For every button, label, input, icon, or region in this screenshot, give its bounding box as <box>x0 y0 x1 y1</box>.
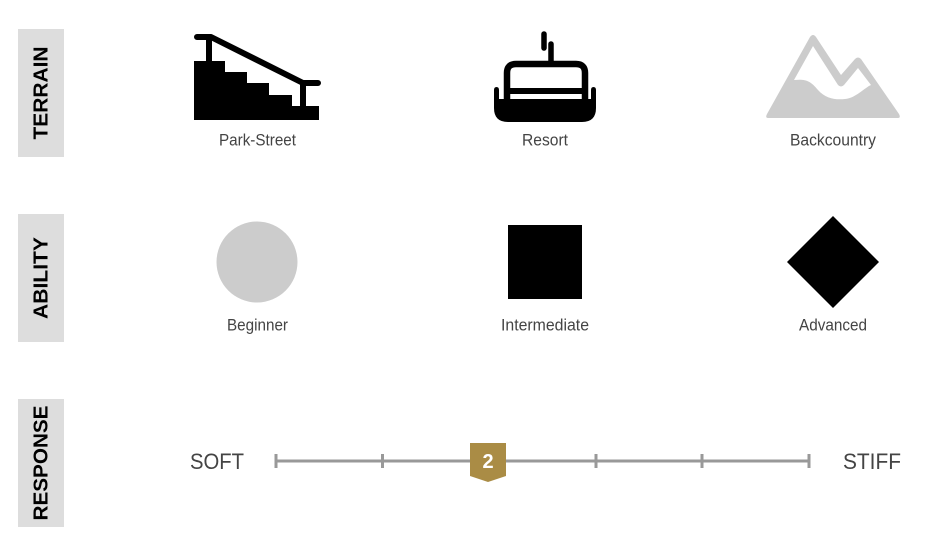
heading: terrain: TERRAIN <box>30 46 52 140</box>
icon: stair rail <box>194 37 319 120</box>
slider scale <box>276 454 809 468</box>
row: response <box>18 399 901 527</box>
label: advanced: Advanced <box>799 316 867 334</box>
label: resort: Resort <box>522 132 568 150</box>
heading: ability: ABILITY <box>30 236 52 319</box>
row: terrain <box>18 29 900 157</box>
heading: terrain <box>18 29 64 157</box>
label: soft: SOFT <box>190 449 244 474</box>
label: beginner: Beginner <box>227 316 288 334</box>
label: stiff: STIFF <box>843 449 901 474</box>
icon: mountain <box>766 35 900 118</box>
slider marker: 2 <box>470 443 506 482</box>
icon: diamond <box>787 216 879 308</box>
label: intermediate: Intermediate <box>501 316 589 334</box>
slider marker: 2: 2 <box>482 451 494 473</box>
heading: response <box>18 399 64 527</box>
heading: response: RESPONSE <box>30 405 52 521</box>
label: park-street: Park-Street <box>219 132 296 150</box>
label: backcountry: Backcountry <box>790 132 877 150</box>
icon: square <box>508 225 582 299</box>
row: ability <box>18 214 879 342</box>
heading: ability <box>18 214 64 342</box>
icon: chairlift <box>494 34 596 122</box>
icon: circle <box>216 222 298 302</box>
